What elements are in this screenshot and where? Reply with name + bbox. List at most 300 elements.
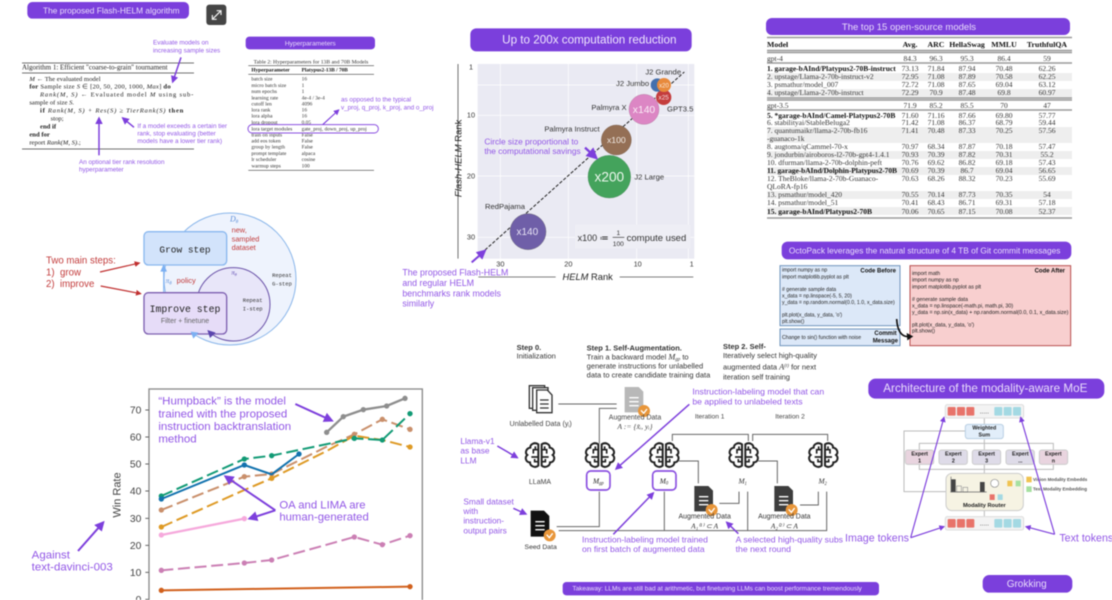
results table: 57.18 — [1039, 198, 1056, 207]
bubble: gpt3.5 — [656, 90, 693, 113]
results table: 87.33 — [959, 126, 976, 135]
y axis: 10 — [130, 568, 142, 579]
bubble: palmyra x: Palmyra X — [591, 103, 627, 112]
heading: hyperparameters — [246, 37, 375, 49]
axis labels: 30 — [467, 232, 475, 241]
results table: 5. *garage-bAInd/Camel-Platypus2-70B — [767, 111, 895, 120]
bubble: redpajama: x140 — [517, 227, 539, 238]
results table: 62.26 — [1039, 64, 1056, 73]
results table: 55.2 — [1040, 150, 1054, 159]
hyperparameters table: group by length — [251, 145, 285, 151]
results table: 69.18 — [996, 158, 1013, 167]
results table: 3. psmathur/model_007 — [767, 80, 838, 89]
step 1 text: Step 1. Self-Augmentation. — [587, 344, 682, 353]
arrow: policy: π — [166, 276, 169, 285]
arrow: to grow — [100, 263, 139, 272]
output tokens: ..... — [980, 408, 989, 415]
weighted sum — [965, 424, 1003, 439]
experts: Expert — [911, 452, 928, 458]
arrow: policy: policy — [177, 276, 196, 285]
callout: against text-davinci-003 — [32, 522, 113, 574]
results table: 54 — [1043, 190, 1051, 199]
y axis — [130, 406, 149, 600]
arrowheads into improve step — [191, 330, 216, 339]
rank diagonal — [485, 72, 684, 250]
callout: two main steps: 1) — [46, 267, 55, 278]
modality router — [946, 473, 1023, 511]
results table: 88.32 — [959, 174, 976, 183]
code after: # generate sample data — [912, 297, 968, 303]
bubble: j2 jumbo: J2 Jumbo — [616, 79, 649, 88]
step 1 text: generate instructions for unlabelled — [587, 362, 703, 371]
callout: selected subset — [727, 522, 844, 554]
label: dataset: dataset — [232, 243, 256, 252]
callout: human-generated: OA and LIMA are — [279, 499, 366, 511]
callout: benchmarks rank similarly: benchmarks rank models — [402, 288, 502, 298]
results table: 70.14 — [928, 190, 945, 199]
results table: 70 — [1000, 101, 1008, 110]
bubble: redpajama — [485, 202, 546, 250]
hyperparameters table: batch size — [251, 77, 273, 83]
callout: llama base: LLM — [460, 455, 477, 465]
weighted sum: Sum — [979, 433, 990, 439]
results table: 71.60 — [902, 111, 919, 120]
y axis: 70 — [130, 406, 142, 417]
commit message: Message — [873, 339, 899, 345]
bubble: palmyra instruct: x100 — [607, 135, 626, 145]
callout: benchmarks rank similarly — [402, 251, 508, 309]
results table: 70.69 — [902, 166, 919, 175]
results table: 70.18 — [996, 142, 1013, 151]
hyperparameters table: Hyperparameter — [251, 68, 290, 74]
code before: Code Before — [860, 269, 897, 275]
legend: compute used — [575, 225, 690, 249]
hyperparameters table: lr scheduler — [251, 157, 277, 163]
results table: 85.2 — [929, 101, 943, 110]
results table: 85.5 — [960, 101, 974, 110]
label: unlabelled data: Unlabelled Data (y — [510, 420, 568, 428]
brain: m_0 — [650, 443, 679, 490]
results table: 87.48 — [959, 88, 976, 97]
results table: 69.80 — [996, 111, 1013, 120]
results table: 11. garage-bAInd/Dolphin-Platypus2-70B — [767, 166, 897, 175]
commit message: Commit — [874, 331, 897, 337]
callout: humpback — [158, 396, 332, 445]
callout: benchmarks rank similarly: similarly — [402, 299, 435, 309]
code before: import matplotlib.pyplot as plt — [782, 274, 849, 280]
algorithm text block: Algorithm 1: Efficient "coarse-to-grain" tournament — [22, 64, 168, 72]
step 0 text: Step 0. — [517, 343, 541, 352]
algorithm text block — [22, 63, 194, 149]
callout: instruction-labeling model: be applied to unlabeled texts — [692, 396, 803, 406]
callout: two main steps: improve — [60, 279, 94, 290]
takeaway bar: Takeaway: LLMs are still bad at arithmetic, but finetuning LLMs can boost performance tremendously — [572, 586, 863, 593]
results table: 70.39 — [928, 150, 945, 159]
icon: augmented data 2: A₂⁽²⁾ ⊂ A — [770, 522, 798, 531]
callout: instruction-labeling model — [616, 387, 824, 469]
results table: 7. quantumaikr/llama-2-70b-fb16 — [767, 126, 868, 135]
arrow: policy: θ — [169, 281, 172, 286]
bubble: gpt3.5: GPT3.5 — [667, 104, 693, 113]
results table: gpt-4 — [767, 54, 783, 63]
label: repeat g-step: G-step — [272, 281, 292, 288]
results table: 71.16 — [928, 111, 945, 120]
label: iteration 2: Iteration 2 — [775, 413, 805, 420]
brain: m_gp: gp — [599, 482, 604, 487]
callout: small dataset: output pairs — [463, 525, 507, 535]
heading: 200x reduction — [470, 28, 692, 51]
bubble: j2 grande: x20 — [659, 83, 669, 89]
icon: augmented data 1 — [678, 486, 731, 531]
icon: augmented data grey — [625, 387, 650, 417]
code before: y_data = np.random.normal(0.0, 1.0, x_data.size) — [782, 300, 895, 306]
experts: 1 — [918, 458, 921, 464]
heading: architecture — [868, 379, 1104, 399]
results table: 70.48 — [928, 126, 945, 135]
results table: 70.97 — [902, 142, 919, 151]
code after: x_data = np.linspace(-math.pi, math.pi, 30) — [912, 303, 1013, 309]
callout: benchmarks rank similarly: and regular HELM — [402, 278, 474, 288]
bubble: palmyra x: x140 — [633, 105, 655, 116]
axis labels — [467, 62, 694, 268]
results table: 70.35 — [996, 190, 1013, 199]
results table: 71.08 — [928, 118, 945, 127]
brain: m_2: 2 — [825, 482, 828, 487]
inner repeat circle — [197, 268, 270, 341]
results table: 87.73 — [959, 190, 976, 199]
plot area — [478, 64, 694, 259]
results table: 70.41 — [902, 198, 919, 207]
y axis: 30 — [130, 514, 142, 525]
arrow: before to after — [897, 319, 913, 340]
axis labels: 30 — [496, 259, 504, 268]
label: inner policy: θ — [235, 272, 238, 277]
bubble: j2 grande: J2 Grande — [645, 68, 681, 77]
callout: selected subset: the next round — [736, 544, 791, 554]
callout: circle size: the computational savings — [484, 146, 581, 156]
experts: Expert — [978, 452, 995, 458]
callout: evaluate on increasing sample sizes: Evaluate models on — [153, 40, 209, 47]
hyperparameters table: 1 — [302, 89, 305, 95]
experts: 3 — [985, 458, 988, 464]
step 2 text: iteration self training — [723, 373, 790, 382]
code after: import matplotlib.pyplot as plt — [912, 284, 982, 290]
results table: 96.3 — [929, 54, 943, 63]
results table: 71.08 — [928, 72, 945, 81]
results table: 59.44 — [1039, 118, 1056, 127]
callout: trained on first batch: Instruction-labeling model trained — [582, 534, 708, 544]
experts — [905, 450, 1068, 464]
hyperparameters table: add eos token — [251, 139, 281, 145]
axis labels: 10 — [634, 259, 642, 268]
code after: y_data = np.sin(x_data) + np.random.normal(0.0, 0.1, x_data.size) — [912, 310, 1069, 316]
hyperparameters table: lora rank — [251, 108, 271, 114]
results table: 13. psmathur/model_420 — [767, 190, 842, 199]
experts: 2 — [952, 458, 955, 464]
axis title: y: Flash-HELM Rank — [454, 119, 465, 197]
algorithm text block: end for — [29, 131, 50, 138]
legend: compute used: x100 ≔ — [578, 233, 609, 243]
callout: lora target modules: v_proj, q_proj, k_proj, and o_proj — [341, 105, 434, 112]
y axis title: Win Rate — [112, 472, 124, 518]
results table: 95.3 — [960, 54, 974, 63]
callout: small dataset: instruction- — [463, 516, 504, 526]
results table: 72.95 — [902, 72, 919, 81]
results table: 55.69 — [1039, 174, 1056, 183]
results table: 59 — [1043, 54, 1051, 63]
arrow: policy — [160, 264, 196, 292]
results table: 71.41 — [902, 126, 919, 135]
icon: seed data — [525, 511, 557, 551]
results table: 56.65 — [1039, 166, 1056, 175]
results table: 4. upstage/Llama-2-70b-instruct — [767, 88, 865, 97]
input tokens: ..... — [980, 520, 989, 527]
hyperparameters table: train on inputs — [251, 132, 282, 138]
hyperparameters table: micro batch size — [251, 83, 287, 89]
axis labels: 20 — [467, 171, 475, 180]
results table: 71.9 — [903, 101, 917, 110]
heading: top 15: The top 15 open-source models — [842, 22, 976, 33]
results table: 71.08 — [928, 80, 945, 89]
results table: gpt-3.5 — [767, 101, 789, 110]
hyperparameters table: gate_proj, down_proj, up_proj — [302, 126, 367, 132]
results table: 87.94 — [959, 64, 976, 73]
label: inner policy: π — [231, 270, 235, 277]
results table: 69.62 — [928, 158, 945, 167]
results table: 57.56 — [1039, 126, 1056, 135]
results table: 8. augtoma/qCammel-70-x — [767, 142, 848, 151]
results table: ARC — [928, 40, 945, 49]
heading: hyperparameters: Hyperparameters — [285, 40, 336, 47]
callout: llama base: Llama-v1 — [460, 436, 495, 446]
callout: lora target modules — [248, 97, 434, 133]
axis labels: 1 — [690, 259, 694, 268]
hyperparameters table: prompt template — [251, 151, 287, 157]
callout: lora target modules: as opposed to the typical — [341, 97, 411, 104]
bubble: redpajama: RedPajama — [485, 202, 526, 211]
experts: n — [1052, 458, 1055, 464]
results table: 86.7 — [960, 166, 974, 175]
step 2 text: augmented data A — [723, 363, 784, 372]
panel: modality-aware moe — [845, 379, 1112, 593]
results table: 71.42 — [902, 118, 919, 127]
experts: ... — [1018, 458, 1023, 464]
label: repeat i-step: Repeat — [243, 297, 263, 304]
series: tan dashed — [159, 417, 413, 513]
callout: two main steps: Two main steps: — [46, 256, 116, 267]
results table: 63.12 — [1039, 80, 1056, 89]
results table: 2. upstage/Llama-2-70b-instruct-v2 — [767, 72, 874, 81]
callout: small dataset: Small dataset — [463, 496, 514, 506]
results table: Model — [767, 40, 789, 49]
results table: 70.65 — [928, 207, 945, 216]
callout: llama base: as base — [460, 446, 490, 456]
results table: 70.23 — [996, 174, 1013, 183]
icon: unlabelled data — [529, 386, 552, 413]
input tokens — [945, 517, 1024, 530]
hyperparameters table: 4e-4 / 3e-4 — [302, 95, 325, 101]
brain: m_gp: M — [593, 476, 599, 485]
code after: plt.plot(x_data, y_data, 'o') — [912, 322, 974, 328]
y axis: 50 — [130, 460, 142, 471]
series: mauve dashed — [159, 533, 413, 573]
step 2 text: for next — [789, 363, 817, 372]
icon: augmented data 1: Augmented Data — [678, 513, 731, 520]
results table: 1. garage-bAInd/Platypus2-70B-instruct — [767, 64, 896, 73]
step 2 text: Step 2. Self- — [723, 342, 766, 351]
step 1 text: Train a backward model M — [587, 352, 675, 361]
algorithm text block: end if — [40, 124, 57, 131]
results table: 15. garage-bAInd/Platypus2-70B — [767, 207, 872, 216]
weighted sum: Weighted — [972, 426, 996, 432]
improve step box — [144, 293, 227, 334]
results table: 57.47 — [1039, 142, 1056, 151]
results table: 70.31 — [996, 150, 1013, 159]
hyperparameters table: lora alpha — [251, 114, 273, 120]
arrow: to improve — [101, 286, 141, 294]
hyperparameters table: 16 — [302, 77, 307, 83]
label: unlabelled data: i — [568, 423, 569, 428]
outer repeat circle — [164, 213, 296, 345]
brain: m_2 — [809, 443, 838, 487]
callout: text tokens — [1021, 417, 1112, 544]
step 2 text: Iteratively select high-quality — [723, 351, 817, 360]
heading: architecture: Architecture of the modality-aware MoE — [883, 382, 1088, 395]
callout: human-generated — [225, 476, 369, 524]
axis title: x: HELM Rank — [563, 272, 613, 282]
experts: Expert — [1012, 452, 1029, 458]
results table: 87.87 — [959, 142, 976, 151]
results table: 68.43 — [928, 198, 945, 207]
series: orange dashed — [159, 436, 413, 530]
algorithm text block: if Rank(M, S) + Res(S) ≥ TierRank(S) then — [40, 108, 184, 115]
results table: 70.39 — [928, 166, 945, 175]
heading: octopack: OctoPack leverages the natural structure of 4 TB of Git commit messages — [789, 246, 1060, 256]
panel: self-augmentation pipeline — [460, 342, 879, 595]
callout: stop evaluating: If a model exceeds a certain tier — [137, 123, 227, 130]
callout: human-generated: human-generated — [279, 512, 369, 524]
axis labels: 1 — [469, 62, 473, 71]
legend: compute used: 100 — [613, 241, 624, 248]
step 0 text: Initialization — [517, 352, 556, 361]
results table: 60.97 — [1039, 88, 1056, 97]
code after: import math — [912, 271, 940, 277]
results table: 87.89 — [959, 72, 976, 81]
callout: humpback: trained with the proposed — [158, 408, 287, 420]
modality router: Modality Router — [963, 503, 1006, 509]
callout: evaluate on increasing sample sizes: increasing sample sizes — [153, 48, 220, 55]
callout: two main steps: grow — [60, 267, 81, 278]
callout: instruction-labeling model: Instruction-labeling model that can — [692, 387, 824, 397]
brain: m_0: M — [660, 476, 666, 485]
grow step box: Grow step — [159, 244, 211, 255]
experts: Expert — [1045, 452, 1062, 458]
results table: 69.04 — [996, 80, 1013, 89]
results table: 70.76 — [902, 158, 919, 167]
hyperparameters table: False — [302, 139, 314, 145]
results table: 12. TheBloke/llama-2-70b-Guanaco- — [767, 174, 879, 183]
label: repeat g-step: Repeat — [272, 272, 292, 279]
router connector lines — [904, 417, 1053, 517]
callout: against text-davinci-003: Against — [32, 549, 71, 561]
results table: 87.65 — [959, 80, 976, 89]
bubble: j2 large: J2 Large — [634, 172, 664, 181]
hyperparameters table: num epochs — [251, 89, 277, 95]
algorithm text block: report Rank(M, S).; — [29, 139, 81, 146]
brain: m_2: M — [818, 477, 825, 486]
results table: 70.48 — [996, 64, 1013, 73]
brain: m_gp — [586, 443, 614, 490]
series: blue — [159, 451, 302, 502]
results table: -guanaco-1k — [767, 134, 805, 143]
results table: QLoRA-fp16 — [767, 182, 808, 191]
results table: 68.26 — [928, 174, 945, 183]
brain: m_1: M — [738, 477, 745, 486]
callout: benchmarks rank similarly: The proposed Flash-HELM — [402, 268, 508, 278]
hyperparameters table — [248, 58, 374, 170]
series: grey — [324, 396, 408, 435]
series: pink — [159, 516, 247, 538]
panel: bubble chart computation reduction — [402, 28, 694, 309]
hyperparameters table: 16 — [302, 114, 307, 120]
brain: m_1: 1 — [745, 482, 747, 487]
callout: tier rank resolution: hyperparameter — [79, 167, 124, 174]
results table: 70.63 — [902, 174, 919, 183]
callout: tier rank resolution: An optional tier rank resolution — [79, 159, 165, 166]
legend: compute used: compute used — [627, 233, 686, 244]
callout: two main steps — [46, 256, 116, 290]
results table: MMLU — [991, 40, 1017, 49]
hyperparameters table: cutoff len — [251, 100, 272, 107]
bubble: gpt3.5: x25 — [659, 95, 669, 102]
step 1 text: to — [680, 352, 689, 361]
results table: Avg. — [903, 40, 917, 49]
y axis: 60 — [130, 433, 142, 444]
icon: augmented data 1: A₁⁽¹⁾ ⊂ A — [690, 522, 719, 531]
results table: 70.25 — [996, 126, 1013, 135]
grokking pill — [983, 575, 1072, 593]
callout: humpback: method — [158, 433, 197, 445]
hyperparameters table: 100 — [302, 163, 310, 169]
algorithm text block: M ← The evaluated model — [28, 76, 101, 83]
callout: stop evaluating — [123, 118, 227, 145]
panel: octopack — [780, 242, 1071, 346]
hyperparameters table: Table 2: Hyperparameters for 13B and 70B Models — [254, 58, 368, 65]
results table: 57.77 — [1039, 111, 1056, 120]
algorithm text block: stop; — [51, 116, 64, 123]
callout: stop evaluating: rank, stop evaluating (better — [137, 131, 216, 138]
results table: 87.82 — [959, 150, 976, 159]
results table: HellaSwag — [949, 40, 985, 49]
results table: 72.72 — [902, 80, 919, 89]
heading: proposed algorithm — [27, 2, 189, 19]
legend: compute used: 1 — [616, 230, 620, 237]
hyperparameters table: cosine — [302, 157, 316, 163]
results table — [767, 38, 1072, 218]
label: dataset: new, — [232, 225, 247, 234]
improve step box: Filter + finetune — [161, 318, 209, 325]
results table: 72.29 — [902, 88, 919, 97]
legend: modality embeddings — [1026, 477, 1088, 492]
results table: 69.31 — [996, 198, 1013, 207]
results table: 14. psmathur/model_51 — [767, 198, 838, 207]
label: iteration 1: Iteration 1 — [695, 413, 725, 420]
axis labels: 10 — [467, 110, 475, 119]
step 1 text: data to create candidate training data — [587, 371, 711, 380]
code before: # generate sample data — [782, 287, 836, 293]
results table: TruthfulQA — [1027, 40, 1067, 49]
hyperparameters table: 1 — [302, 83, 305, 89]
